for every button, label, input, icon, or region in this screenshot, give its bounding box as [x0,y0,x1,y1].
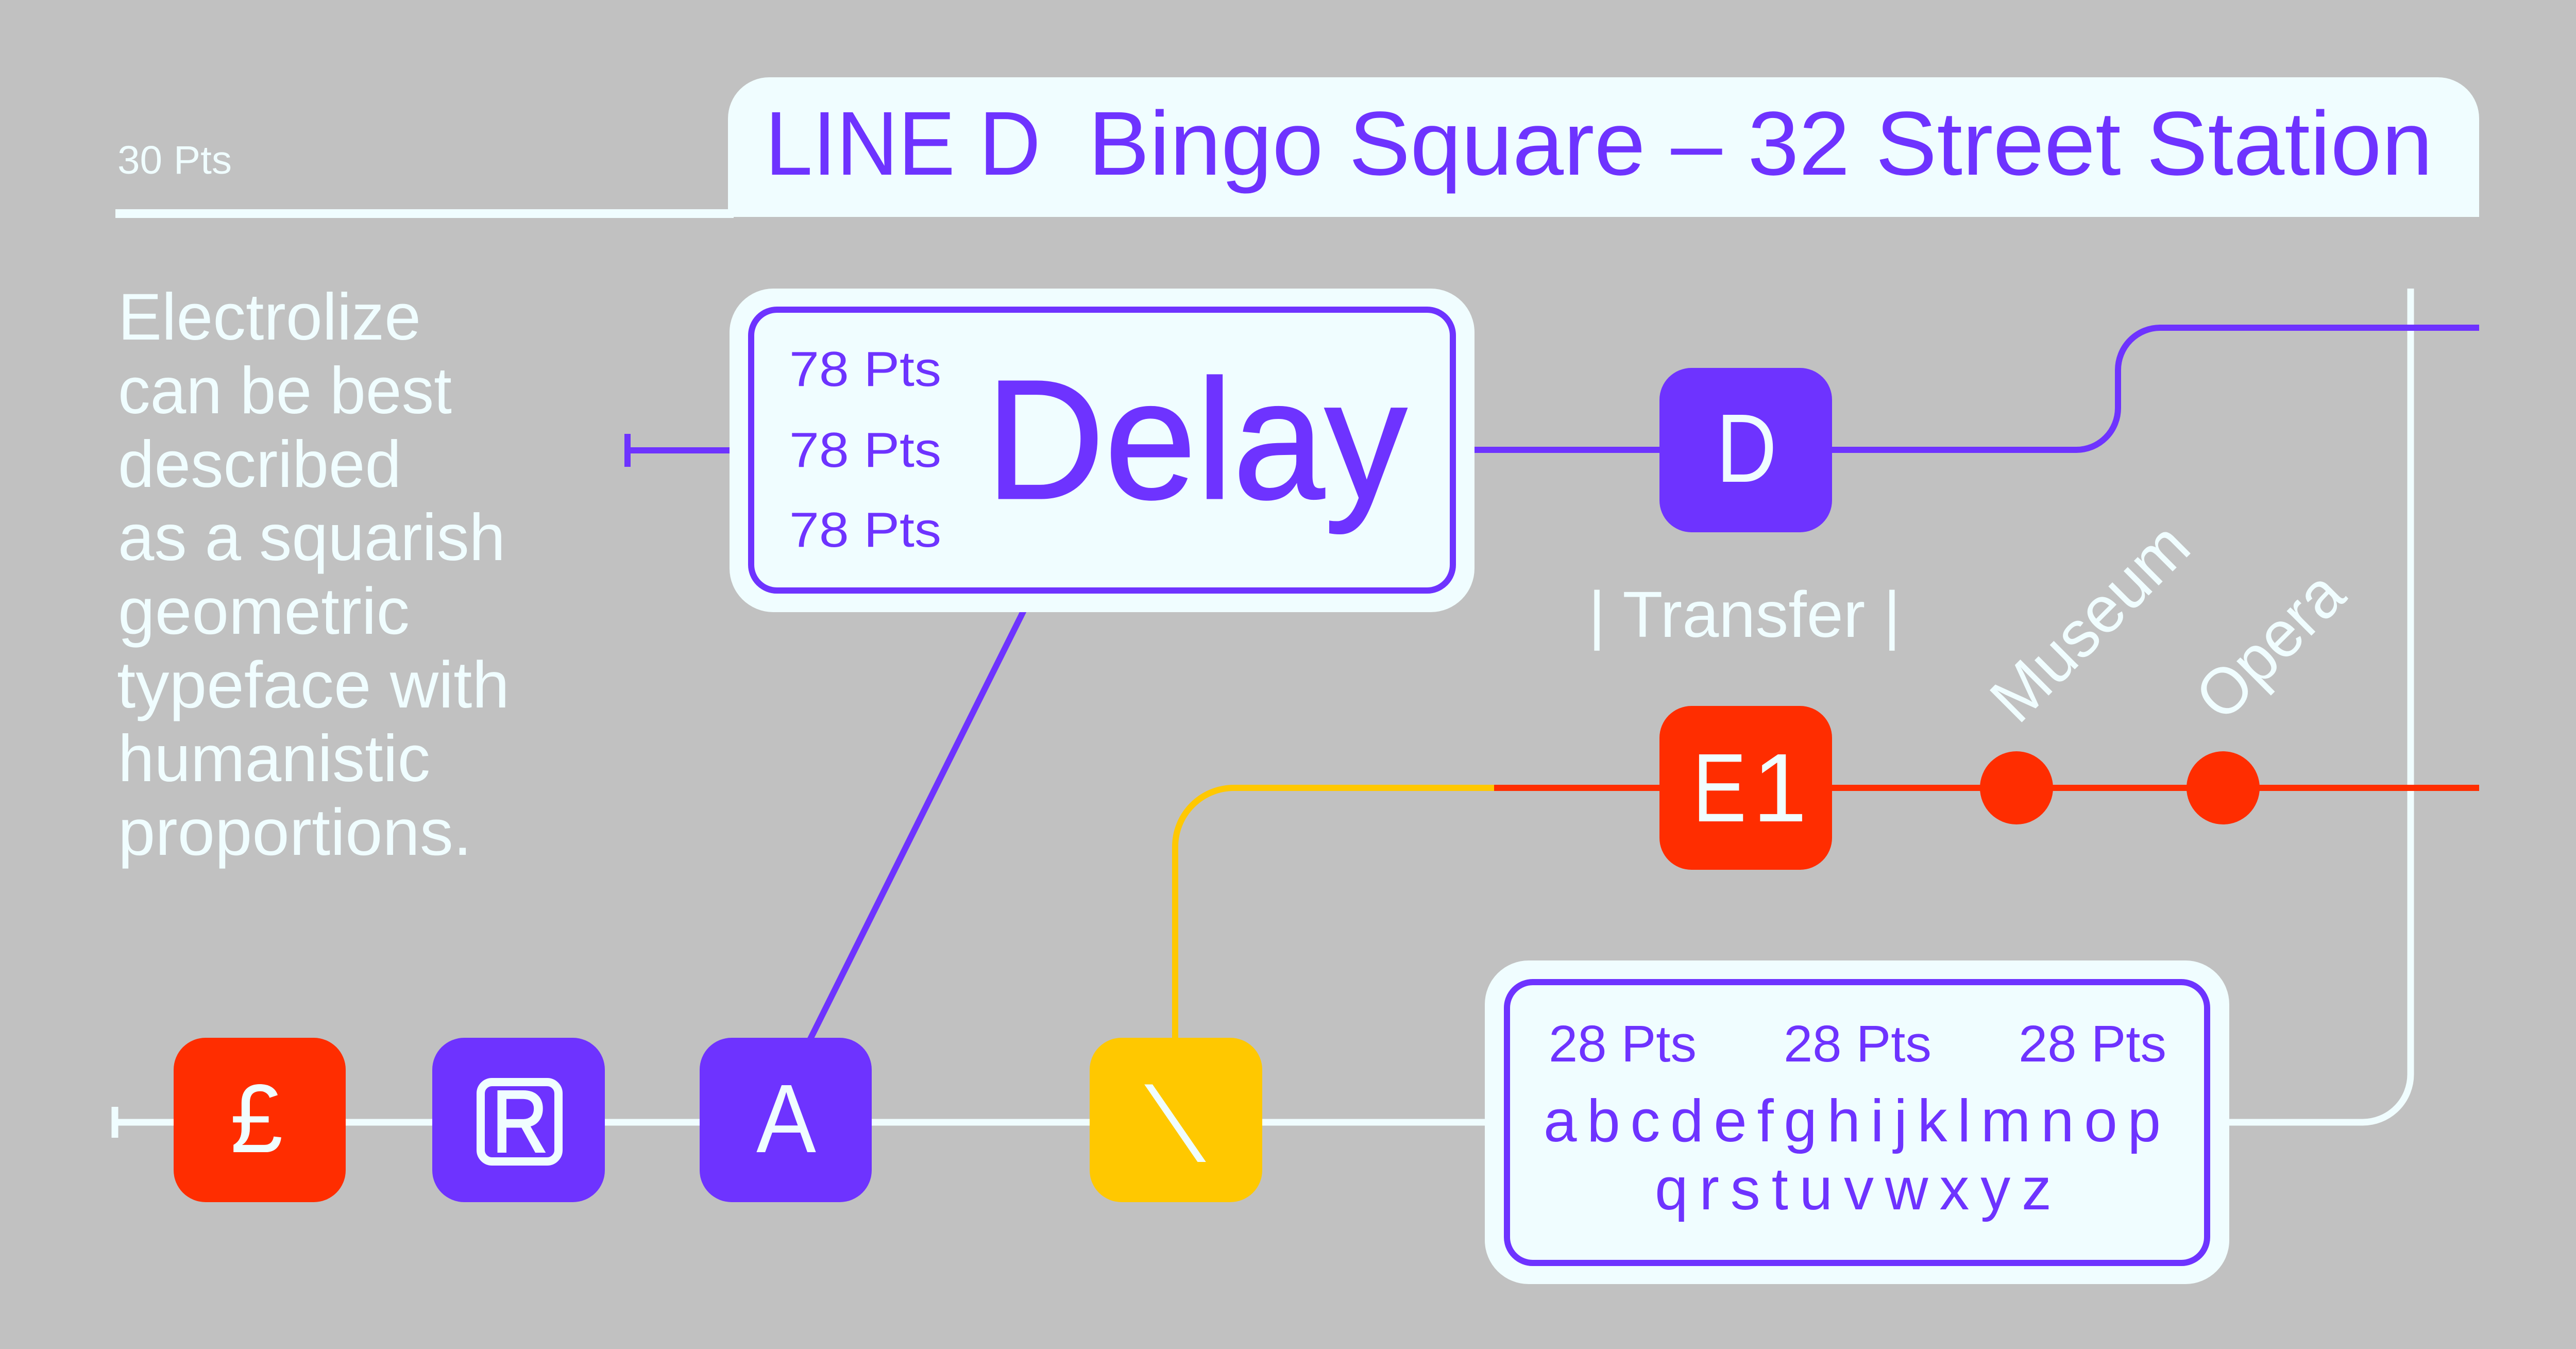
size labels: 28 Pts: 28 Pts [1784,1015,1931,1073]
title banner: LINE D [765,93,1041,194]
badge: pound: £ [230,1065,283,1173]
title banner [728,77,2479,218]
station stop: Museum [1980,751,2053,824]
description paragraph: as a squarish [118,501,505,575]
description paragraph: humanistic [118,722,430,796]
panel: Delay sign [730,289,1475,612]
title banner: Bingo Square – 32 Street Station [1088,93,2433,194]
description paragraph: can be best [118,354,452,428]
transfer label: | Transfer | [1588,578,1901,651]
size labels: 78 Pts: 78 Pts [789,423,941,478]
red line E1 route [1494,785,2479,791]
white transit line: vertical and bottom [115,289,2411,1138]
badge: registered: R [492,1073,548,1171]
alphabet specimen: abcdefghijklmnop [1544,1087,2161,1154]
size labels: 78 Pts [789,342,941,558]
description paragraph [117,280,510,869]
badge: A [700,1038,872,1202]
badge: registered [432,1038,605,1202]
size labels: 28 Pts: 28 Pts [1549,1015,1697,1073]
word: Delay: Delay [986,344,1407,535]
description paragraph: proportions. [118,796,472,869]
size label: 30 Pts: 30 Pts [117,138,232,182]
description paragraph: geometric [118,575,410,648]
station name: Opera: Opera [2181,557,2359,734]
alphabet specimen: qrstuvwxyz [1655,1155,2052,1222]
size labels: 28 Pts: 28 Pts [2019,1015,2166,1073]
badge: backslash [1090,1038,1262,1202]
size labels: 78 Pts: 78 Pts [789,342,941,397]
station badge: D [1659,368,1832,532]
yellow connector line [1175,788,1497,1041]
alphabet specimen [1544,1087,2161,1222]
description paragraph: Electrolize [118,280,421,354]
description paragraph: described [118,428,401,501]
header rule [115,209,734,218]
station name: Museum: Museum [1976,509,2204,736]
station badge: D: D [1716,394,1777,503]
station badge: E1: E [1692,734,1747,842]
station stop: Opera [2187,751,2260,824]
station badge: E1: 1 [1753,734,1807,842]
panel: alphabet sign [1485,960,2229,1284]
badge: A: A [756,1065,816,1173]
station badge: E1 [1659,706,1832,870]
badge: backslash: \ [1137,1066,1215,1184]
purple line D route [628,328,2479,1040]
badge: pound [174,1038,346,1202]
description paragraph: typeface with [117,648,510,722]
size labels: 78 Pts: 78 Pts [789,502,941,558]
size labels: 28 Pts [1549,1015,2166,1073]
